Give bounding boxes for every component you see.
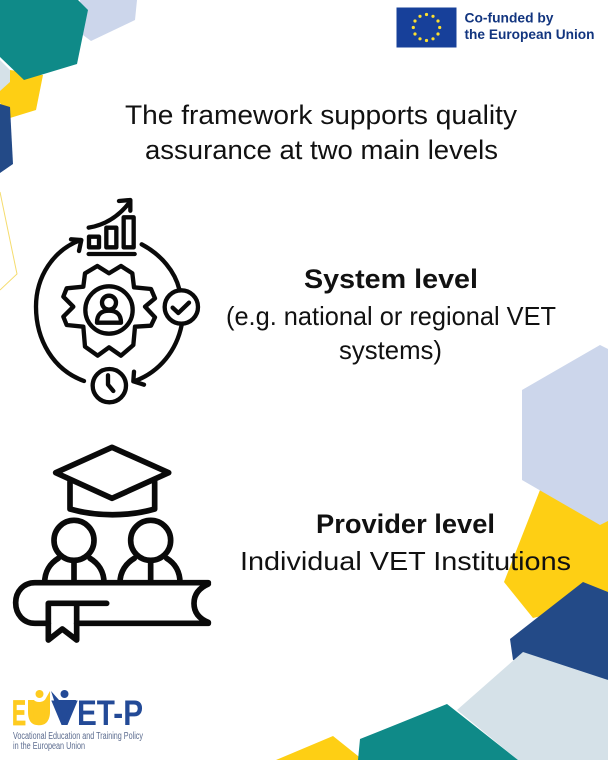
- logo figures: [28, 690, 76, 725]
- icon: growth arrow: [89, 200, 130, 228]
- text: system level description: systems): [339, 335, 442, 365]
- icon: two people: [45, 520, 180, 583]
- icon: gear with person: [63, 266, 155, 356]
- logo tagline: in the European Union: [13, 741, 85, 752]
- hexagon cluster: top left: [0, 0, 137, 290]
- icon: graduates with cap and book: [16, 447, 208, 640]
- logo wordmark: [12, 694, 143, 733]
- logo wordmark: ET-P: [77, 694, 143, 733]
- logo: EUVET-P: [12, 690, 143, 752]
- text: provider level description: Individual VET Institutions: [240, 546, 571, 576]
- icon: gear, chart and cycle arrows: [36, 200, 198, 402]
- icon: EU flag: [396, 8, 456, 48]
- logo tagline: [13, 731, 143, 752]
- text: provider level: [240, 509, 571, 576]
- title: The framework supports quality: [125, 100, 518, 130]
- title: [125, 100, 518, 165]
- logo wordmark: U: [27, 694, 51, 733]
- icon: bar chart: [89, 217, 135, 254]
- hexagon cluster: bottom right: [276, 345, 608, 760]
- text: co-funded by: Co-funded by: [464, 10, 554, 26]
- logo tagline: Vocational Education and Training Policy: [13, 731, 143, 742]
- title: assurance at two main levels: [145, 135, 498, 165]
- icon: graduation cap: [56, 447, 169, 515]
- text: system level description: [226, 301, 556, 365]
- logo: co-funded by the European Union: [396, 8, 594, 48]
- logo wordmark: V: [51, 694, 79, 733]
- heading: provider level: Provider level: [316, 509, 495, 539]
- text: system level description: (e.g. national or regional VET: [226, 301, 556, 331]
- icon: cycle arrows: [36, 239, 182, 385]
- icon: book with bookmark: [16, 583, 208, 640]
- logo wordmark: E: [12, 694, 26, 733]
- text: system level: [226, 264, 556, 365]
- icon: clock: [93, 369, 126, 402]
- text: the European Union: the European Union: [464, 27, 594, 42]
- icon: check badge: [165, 290, 198, 324]
- heading: system level: System level: [304, 264, 478, 294]
